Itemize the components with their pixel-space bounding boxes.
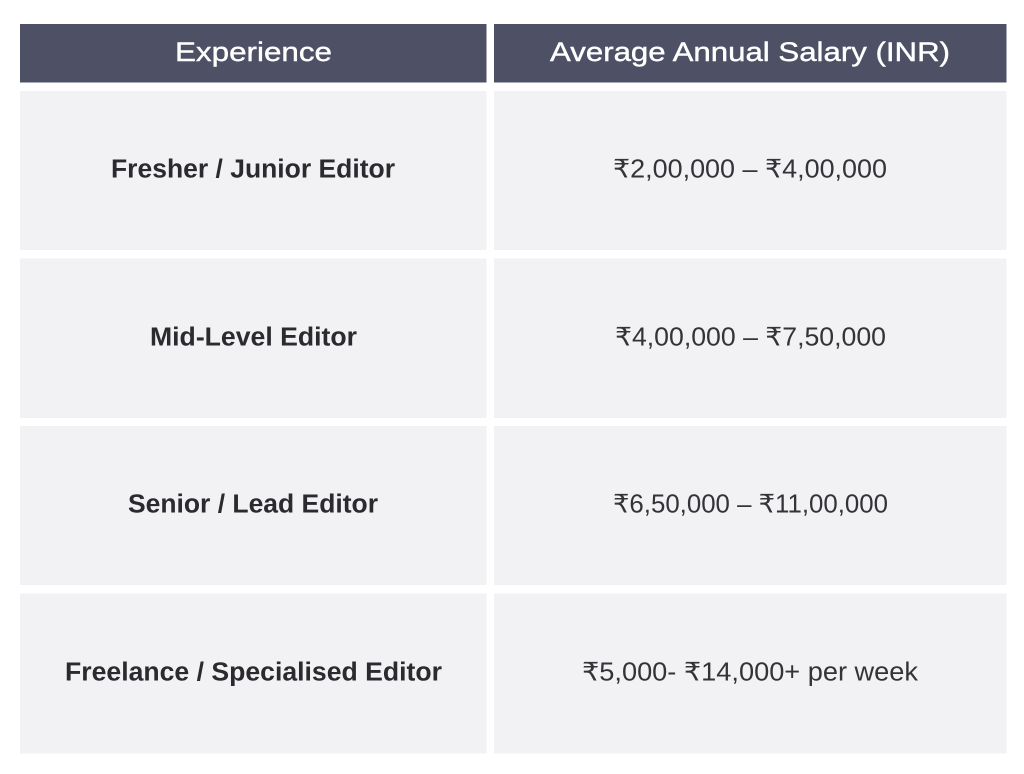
row 4 salary xyxy=(494,594,1006,754)
header: Experience: Experience xyxy=(175,37,332,67)
row 1 salary xyxy=(494,91,1006,250)
row 3 experience: Senior / Lead Editor xyxy=(20,426,486,585)
row 3 salary xyxy=(494,426,1006,585)
row 3 experience: Senior / Lead Editor: Senior / Lead Editor xyxy=(128,490,378,518)
row 1 salary: ₹2,00,000 – ₹4,00,000 xyxy=(613,156,887,184)
header: Average Annual Salary (INR): Average Annual Salary (INR) xyxy=(550,37,950,67)
row 2 experience: Mid-Level Editor: Mid-Level Editor xyxy=(150,324,357,352)
row 1 experience: Fresher / Junior Editor: Fresher / Junior Editor xyxy=(111,156,395,184)
row 4 experience: Freelance / Specialised Editor xyxy=(20,594,486,754)
header: Average Annual Salary (INR) xyxy=(494,24,1006,82)
row 4 experience: Freelance / Specialised Editor: Freelance / Specialised Editor xyxy=(65,658,442,686)
row 2 experience: Mid-Level Editor xyxy=(20,258,486,418)
header: Experience xyxy=(20,24,486,82)
row 4 salary: ₹5,000- ₹14,000+ per week xyxy=(582,658,918,686)
row 1 experience: Fresher / Junior Editor xyxy=(20,91,486,250)
row 3 salary: ₹6,50,000 – ₹11,00,000 xyxy=(613,490,888,518)
row 2 salary xyxy=(494,258,1006,418)
row 2 salary: ₹4,00,000 – ₹7,50,000 xyxy=(615,324,886,352)
